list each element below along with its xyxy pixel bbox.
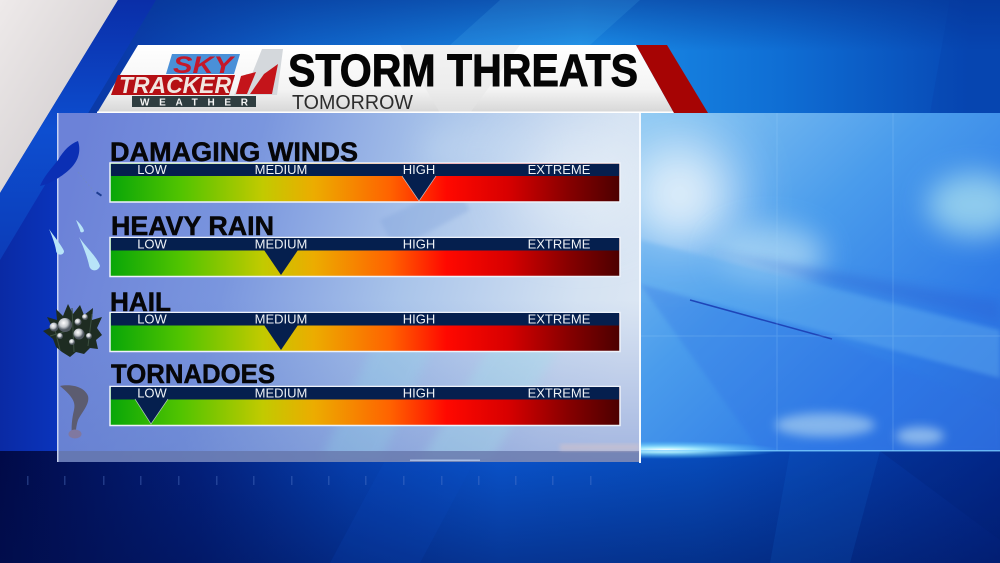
threat bar: Tornadoes, Low: MEDIUM — [255, 386, 307, 400]
logo: Sky Tracker Weather: WEATHER — [140, 98, 249, 108]
threat bar: Heavy Rain, Medium: LOW — [137, 236, 168, 252]
label: Hail: HAIL — [110, 287, 171, 317]
horizon glow — [550, 441, 1000, 459]
logo: Sky Tracker Weather: SKY — [173, 52, 235, 79]
threat bar: Hail, Medium: EXTREME — [528, 312, 591, 326]
label: Damaging Winds: DAMAGING WINDS — [110, 137, 358, 167]
threat bar: Tornadoes, Low: EXTREME — [528, 386, 591, 400]
threat bar: Damaging Winds, High: MEDIUM — [255, 162, 307, 177]
background: right sky with clouds — [625, 113, 1000, 451]
logo: Sky Tracker Weather: TRACKER — [119, 72, 231, 98]
threat bar: Hail, Medium: HIGH — [403, 312, 435, 326]
label: Heavy Rain: HEAVY RAIN — [111, 211, 274, 241]
panel: translucent threat panel — [57, 113, 650, 463]
threat bar: Tornadoes, Low — [110, 386, 620, 426]
threat bar: Heavy Rain, Medium: EXTREME — [528, 236, 591, 252]
background: lower floor — [0, 451, 1000, 563]
icon: rain drops — [49, 220, 100, 270]
logo: Sky Tracker Weather — [111, 49, 283, 108]
icon: windblown flag — [40, 141, 102, 197]
subheading: Tomorrow: TOMORROW — [292, 92, 413, 114]
title banner — [97, 45, 708, 113]
threat bar: Heavy Rain, Medium: MEDIUM — [255, 236, 307, 252]
lightning bolt — [234, 49, 283, 95]
icon: hail in grass — [43, 304, 102, 357]
threat bar: Damaging Winds, High: HIGH — [403, 162, 435, 177]
threat bar: Heavy Rain, Medium — [110, 236, 620, 276]
threat bar: Tornadoes, Low: HIGH — [403, 386, 435, 400]
label: Tornadoes: TORNADOES — [111, 359, 275, 389]
threat bar: Hail, Medium — [110, 312, 620, 352]
threat bar: Damaging Winds, High: LOW — [137, 162, 168, 177]
background: grey corner — [0, 0, 118, 193]
background: left column — [0, 113, 58, 451]
background: top sky band — [0, 0, 1000, 113]
heading: Storm Threats: STORM THREATS — [288, 45, 638, 96]
icon: tornado — [60, 385, 88, 438]
threat bar: Damaging Winds, High: EXTREME — [528, 162, 591, 177]
threat bar: Damaging Winds, High — [110, 162, 620, 202]
threat bar: Hail, Medium: LOW — [137, 312, 168, 326]
red accent stripe — [636, 45, 708, 113]
background: blue diagonal band — [0, 0, 156, 260]
threat bar: Tornadoes, Low: LOW — [137, 386, 168, 400]
threat bar: Heavy Rain, Medium: HIGH — [403, 236, 435, 252]
threat bar: Hail, Medium: MEDIUM — [255, 312, 307, 326]
